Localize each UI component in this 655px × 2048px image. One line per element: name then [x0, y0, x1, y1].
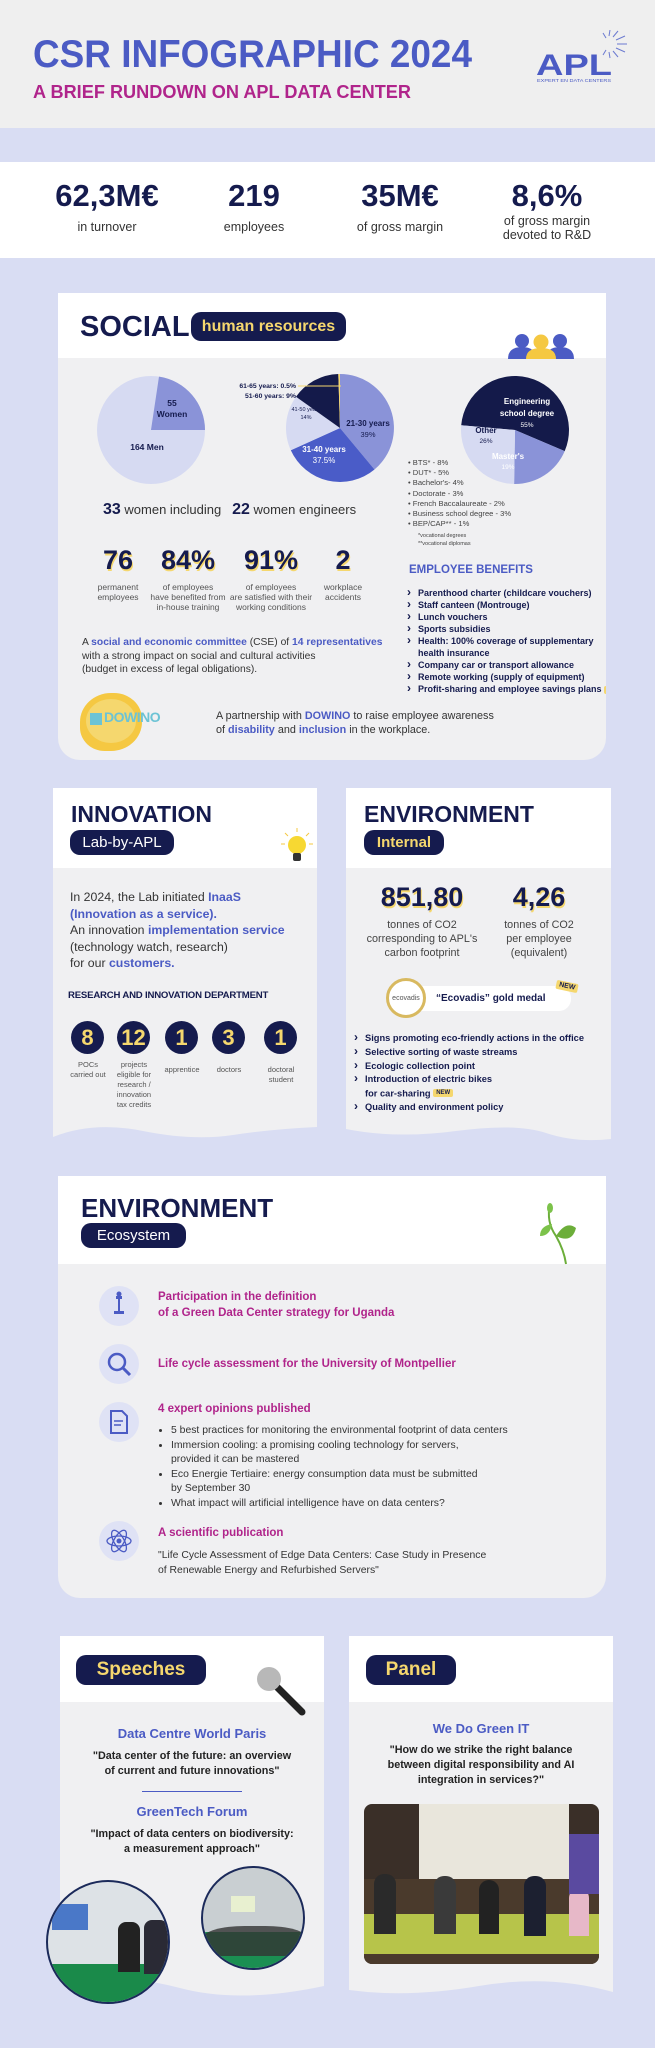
pill: Speeches — [76, 1655, 206, 1685]
heading: SOCIAL: SOCIAL — [80, 311, 190, 343]
item: scientific publication — [99, 1521, 486, 1576]
text: CSE: with a strong impact on social and cultural activities — [82, 650, 316, 662]
text: CSE — [82, 637, 382, 675]
panel: social — [58, 293, 606, 760]
pill: Panel: Panel — [386, 1659, 436, 1680]
icon: bulb — [281, 828, 313, 861]
heading: employee benefits: EMPLOYEE BENEFITS — [409, 564, 533, 576]
list: degrees: • DUT* - 5% — [408, 468, 449, 477]
stats: HR figures: are satisfied with their — [230, 592, 312, 602]
talk: we do green it: between digital responsibility and AI — [388, 1759, 574, 1771]
chart: age pie: 61-65 years: 0.5% — [239, 383, 296, 390]
chart: age pie: 21-30 years — [346, 419, 390, 428]
icon: document — [99, 1402, 139, 1442]
stats: HR figures: 76 — [103, 545, 133, 575]
item: Uganda: of a Green Data Center strategy for Uganda — [158, 1307, 394, 1319]
chart: degree pie: 26% — [479, 438, 493, 445]
logo: APL: APL — [536, 49, 612, 82]
list: degrees: • Business school degree - 3% — [408, 509, 511, 518]
stat: employees: 219 — [228, 178, 280, 213]
pill: human resources — [191, 312, 346, 341]
list: internal actions: Ecologic collection point — [365, 1061, 475, 1071]
panel: speeches — [60, 1636, 324, 2004]
talk: greentech forum — [90, 1804, 294, 1855]
icon: microphone — [257, 1667, 306, 1716]
stat: R&D: 8,6% — [512, 178, 582, 213]
stats: R&I circles: 1 — [274, 1024, 287, 1050]
stats band — [0, 162, 655, 258]
stat: employees: employees — [224, 220, 284, 234]
stat: carbon footprint: carbon footprint — [384, 947, 460, 959]
stats: R&I circles: innovation — [117, 1090, 151, 1099]
pill: Lab-by-APL — [70, 830, 174, 855]
text: InaaS: (Innovation as a service). — [70, 906, 217, 920]
heading: INNOVATION: INNOVATION — [71, 801, 212, 827]
text: InaaS: for our customers. — [70, 956, 175, 970]
talk: greentech forum: "Impact of data centers on biodiversity: — [90, 1828, 294, 1840]
item: expert opinions: Eco Energie Tertiaire: energy consumption data must be submitted — [171, 1469, 478, 1480]
subtitle: A BRIEF RUNDOWN ON APL DATA CENTER — [33, 82, 411, 102]
item: Uganda: Participation in the definition — [158, 1291, 316, 1303]
pill: Panel — [366, 1655, 456, 1685]
stats: HR figures: accidents — [325, 592, 361, 602]
pill: Internal — [364, 830, 444, 855]
stat: turnover: in turnover — [77, 220, 137, 234]
chart: gender pie: 55 — [167, 398, 177, 408]
list: degrees: • Doctorate - 3% — [408, 489, 463, 498]
list: internal actions: Introduction of electric bikes — [365, 1074, 492, 1084]
stat: carbon footprint: tonnes of CO2 — [387, 919, 457, 931]
list: internal actions — [354, 1033, 584, 1112]
talk: data centre world: of current and future innovations" — [105, 1765, 279, 1777]
stats: HR figures: working conditions — [236, 602, 306, 612]
icon: chess piece — [99, 1286, 139, 1326]
list: degrees: *vocational degrees — [418, 533, 466, 539]
stat: gross margin — [357, 178, 443, 234]
text: dowino partnership: of disability and inclusion in the workplace. — [216, 724, 430, 736]
stat: gross margin: of gross margin — [357, 220, 443, 234]
stats: R&I circles: POCs — [78, 1060, 98, 1069]
list: benefits — [408, 588, 606, 694]
list: benefits: Company car or transport allowance — [418, 660, 574, 670]
talk: data centre world: "Data center of the future: an overview — [93, 1750, 291, 1762]
stats: R&I circles: research / — [117, 1080, 151, 1089]
list: internal actions: Quality and environment policy — [365, 1102, 503, 1112]
stat: per employee: 4,26 — [513, 882, 565, 912]
stat: turnover: 62,3M€ — [55, 178, 159, 213]
stat: carbon footprint: corresponding to APL's — [367, 933, 477, 945]
chart: degree pie — [461, 376, 569, 484]
stats: R&I circles: student — [269, 1075, 293, 1084]
text: dowino partnership: A partnership with DOWINO to raise employee awareness — [216, 710, 494, 722]
talk: we do green it — [388, 1721, 574, 1786]
chart: degree pie: Other — [475, 426, 497, 435]
stat: per employee: per employee — [506, 933, 572, 945]
item: expert opinions — [99, 1402, 508, 1509]
talk: data centre world — [93, 1726, 292, 1777]
item: scientific publication: of Renewable Energy and Refurbished Servers" — [158, 1565, 379, 1576]
chart: age pie: 37.5% — [313, 456, 335, 465]
stat: per employee: tonnes of CO2 — [504, 919, 574, 931]
badge: ecovadis: “Ecovadis” gold medal — [436, 993, 545, 1004]
text: InaaS: In 2024, the Lab initiated InaaS — [70, 890, 241, 904]
item: scientific publication: A scientific publication — [158, 1527, 283, 1539]
item: scientific publication: "Life Cycle Assessment of Edge Data Centers: Case Study in Presence — [158, 1550, 486, 1561]
chart: gender pie: Women — [157, 409, 187, 419]
item: Montpellier: Life cycle assessment for the University of Montpellier — [158, 1358, 456, 1370]
stats: R&I circles: 3 — [222, 1024, 235, 1050]
stats: HR figures: of employees — [163, 582, 213, 592]
talk: we do green it: integration in services?" — [418, 1774, 544, 1786]
icon: people — [508, 334, 574, 359]
text: InaaS — [70, 890, 285, 970]
stats: R&I circles: doctors — [217, 1065, 241, 1074]
stat: per employee — [504, 882, 574, 959]
list: degrees: • BTS* - 8% — [408, 458, 448, 467]
icon: leaf — [540, 1203, 576, 1264]
photo: greentech audience — [201, 1866, 305, 1970]
text: InaaS: (technology watch, research) — [70, 940, 228, 954]
item: expert opinions: provided it can be mastered — [171, 1454, 299, 1465]
stats: HR figures: workplace — [324, 582, 362, 592]
stats: HR figures: have benefited from — [150, 592, 226, 602]
icon: atom — [99, 1521, 139, 1561]
chart: age pie: 41-50 years — [291, 407, 321, 413]
item: Montpellier — [99, 1344, 456, 1384]
photo: panel stage — [364, 1804, 599, 1964]
stats: HR figures: 2 — [335, 545, 351, 575]
list: degrees — [408, 458, 511, 547]
stat: R&D — [503, 178, 591, 242]
chart: degree pie: school degree — [500, 409, 555, 418]
item: expert opinions: by September 30 — [171, 1483, 250, 1494]
talk: data centre world: Data Centre World Paris — [118, 1726, 266, 1741]
logo: APL: EXPERT EN DATA CENTERS — [537, 78, 611, 83]
list: degrees: **vocational diplomas — [418, 541, 471, 547]
list: benefits: Staff canteen (Montrouge) — [418, 600, 530, 610]
stat: turnover — [55, 178, 159, 234]
stats: HR figures: employees — [97, 592, 139, 602]
pill: Internal: Internal — [377, 834, 431, 851]
chart: degree pie: 55% — [520, 422, 534, 429]
item: expert opinions: 5 best practices for monitoring the environmental footprint of data centers — [171, 1425, 508, 1436]
pill: Lab-by-APL: Lab-by-APL — [82, 834, 162, 851]
list: degrees: • Bachelor's- 4% — [408, 478, 464, 487]
pill: Ecosystem — [81, 1223, 186, 1248]
stat: gross margin: 35M€ — [361, 178, 439, 213]
logo: dowino: DOWINO — [104, 709, 160, 725]
badge: ecovadis — [386, 978, 578, 1018]
stats: R&I circles: doctoral — [268, 1065, 294, 1074]
chart: age pie — [239, 374, 394, 482]
pill: human resources: human resources — [202, 318, 335, 334]
panel: environment ecosystem — [58, 1176, 606, 1598]
list: benefits: Sports subsidies — [418, 624, 491, 634]
stats: HR figures: in-house training — [157, 602, 219, 612]
pill: Speeches: Speeches — [97, 1659, 185, 1680]
chart: gender pie — [97, 376, 205, 484]
list: internal actions: Signs promoting eco-friendly actions in the office — [365, 1033, 584, 1043]
item: expert opinions: What impact will artificial intelligence have on data centers? — [171, 1498, 445, 1509]
item: expert opinions: 4 expert opinions published — [158, 1403, 311, 1415]
item: expert opinions: Immersion cooling: a promising cooling technology for servers, — [171, 1440, 459, 1451]
heading: ENVIRONMENT: ENVIRONMENT — [81, 1193, 273, 1223]
text: dowino partnership — [216, 710, 494, 736]
photo: greentech stage — [46, 1880, 170, 2004]
chart: degree pie: Master's — [492, 452, 525, 461]
text: women engineers: 33 women including 22 women engineers — [103, 501, 356, 518]
talk: greentech forum: GreenTech Forum — [136, 1804, 248, 1819]
stat: employees — [224, 178, 284, 234]
stats: HR figures: 84% — [161, 545, 215, 575]
badge: ecovadis: NEW — [558, 981, 576, 992]
list: degrees: • French Baccalaureate - 2% — [408, 499, 505, 508]
text: CSE: A social and economic committee (CSE) of 14 representatives — [82, 637, 382, 648]
list: degrees: • BEP/CAP** - 1% — [408, 519, 469, 528]
stats: HR figures: of employees — [246, 582, 296, 592]
stat: R&D: devoted to R&D — [503, 228, 591, 242]
text: CSE: (budget in excess of legal obligations). — [82, 664, 257, 675]
chart: degree pie: Engineering — [504, 397, 550, 406]
heading: R&I department: RESEARCH AND INNOVATION DEPARTMENT — [68, 990, 268, 1001]
list: internal actions: for car-sharing NEW — [365, 1089, 450, 1099]
stats: HR figures: permanent — [98, 582, 138, 592]
chart: age pie: 14% — [300, 415, 312, 421]
stat: carbon footprint — [367, 882, 477, 959]
header background — [0, 0, 655, 128]
stats: R&I circles: 12 — [121, 1024, 146, 1050]
chart: age pie: 51-60 years: 9% — [245, 393, 296, 400]
panel: panel discussion — [349, 1636, 613, 2004]
stats: R&I circles — [70, 1021, 297, 1109]
logo: dowino — [80, 693, 142, 751]
talk: greentech forum: a measurement approach" — [124, 1843, 260, 1855]
logo: APL — [536, 30, 627, 83]
item: Uganda — [99, 1286, 394, 1326]
list: benefits: Lunch vouchers — [418, 612, 488, 622]
stat: R&D: of gross margin — [504, 214, 590, 228]
heading: ENVIRONMENT: ENVIRONMENT — [364, 801, 534, 827]
pill: Ecosystem: Ecosystem — [97, 1227, 170, 1244]
list: benefits: Remote working (supply of equipment) — [418, 672, 585, 682]
stats: R&I circles: eligible for — [117, 1070, 151, 1079]
stats: R&I circles: apprentice — [164, 1065, 200, 1074]
stat: carbon footprint: 851,80 — [381, 882, 463, 912]
stats: R&I circles: 8 — [81, 1024, 94, 1050]
stats: R&I circles: tax credits — [117, 1100, 151, 1109]
panel: innovation — [53, 788, 317, 1148]
stats: HR figures — [97, 545, 362, 612]
chart: degree pie: 19% — [501, 464, 515, 471]
talk: we do green it: We Do Green IT — [433, 1721, 529, 1736]
badge: ecovadis: ecovadis — [392, 994, 420, 1002]
stats: R&I circles: 1 — [175, 1024, 188, 1050]
stats: R&I circles: carried out — [70, 1070, 106, 1079]
talk: we do green it: "How do we strike the right balance — [390, 1744, 572, 1756]
list: benefits: Health: 100% coverage of supplementary — [418, 636, 594, 646]
stat: per employee: (equivalent) — [511, 947, 567, 959]
stats: HR figures: 91% — [244, 545, 298, 575]
chart: gender pie: 164 Men — [130, 442, 164, 452]
list: benefits: health insurance — [418, 648, 490, 658]
list: internal actions: Selective sorting of waste streams — [365, 1047, 517, 1057]
list: benefits: Parenthood charter (childcare vouchers) — [418, 588, 592, 598]
stats: R&I circles: projects — [121, 1060, 147, 1069]
chart: age pie: 39% — [360, 430, 376, 439]
icon: magnifier — [99, 1344, 139, 1384]
chart: age pie: 31-40 years — [302, 445, 346, 454]
panel: environment internal — [346, 788, 611, 1148]
text: InaaS: An innovation implementation service — [70, 923, 285, 937]
